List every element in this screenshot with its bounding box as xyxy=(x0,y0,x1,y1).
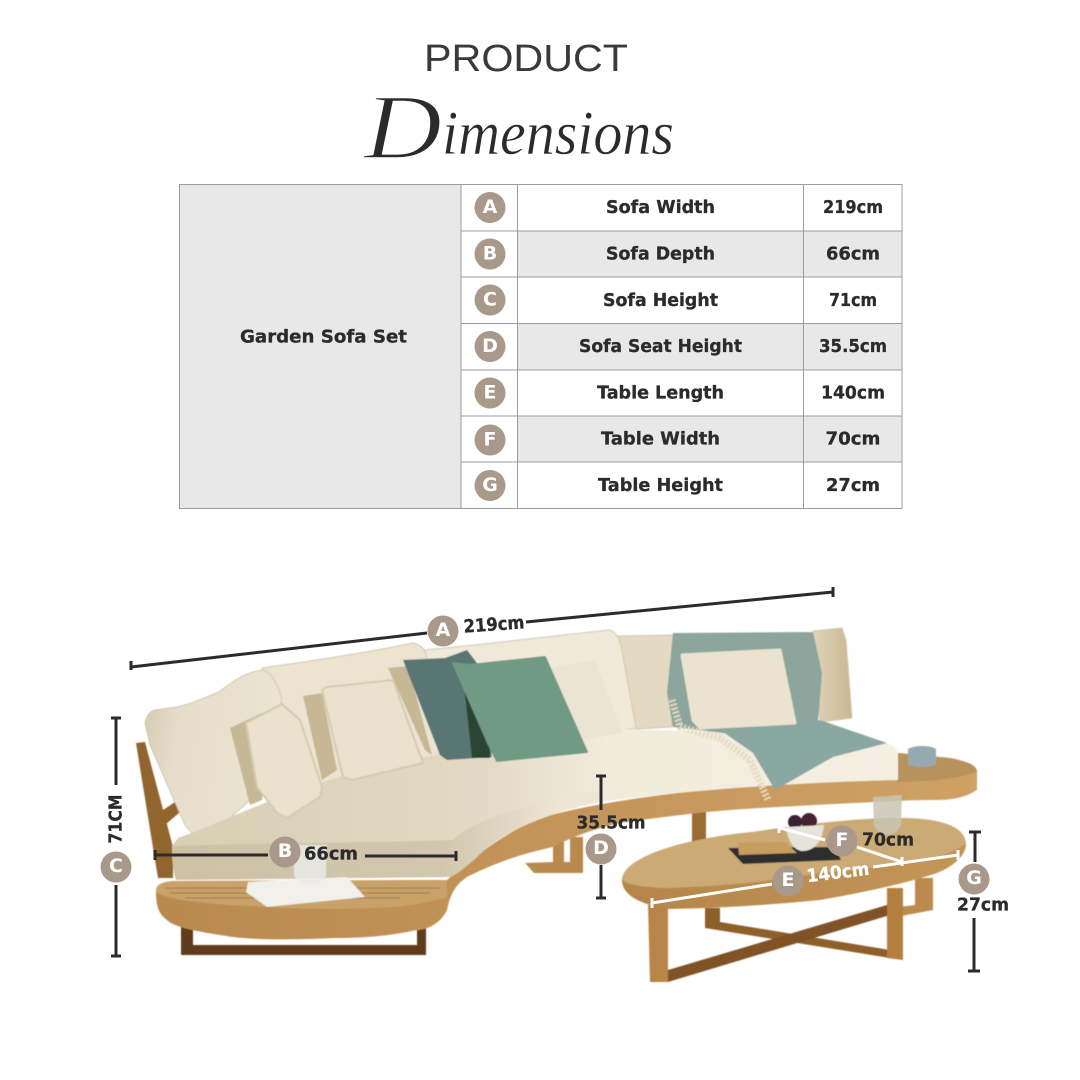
table cell: product name: Garden Sofa Set xyxy=(240,326,407,348)
seat cushion front xyxy=(172,790,600,880)
row F: table width: F xyxy=(484,428,496,450)
row C: sofa height xyxy=(474,284,877,316)
table top xyxy=(622,818,966,888)
back cushion: mid right xyxy=(617,635,673,729)
coffee table xyxy=(622,795,966,982)
row A: sofa width xyxy=(474,192,883,223)
back cushion: left xyxy=(145,670,282,837)
dimension G: table height: G xyxy=(966,867,982,889)
title xyxy=(362,38,674,178)
dimension D: seat height: D xyxy=(593,837,609,859)
dimension C: sofa height: 71CM xyxy=(106,794,126,844)
row F: table width: 70cm xyxy=(826,428,880,450)
curved wooden base xyxy=(156,753,977,939)
dimension F: table width xyxy=(779,823,914,866)
dimension A: sofa width xyxy=(131,587,833,670)
dimension C: sofa height xyxy=(100,718,132,956)
dimension E: table length: 140cm xyxy=(805,859,871,887)
row F: table width xyxy=(474,424,880,456)
dimension A: sofa width: A xyxy=(436,619,451,641)
table rim xyxy=(622,818,966,909)
right table lobe xyxy=(897,753,977,782)
shadows behind pillows xyxy=(230,666,432,805)
row B: sofa depth: Sofa Depth xyxy=(606,244,715,264)
row B: sofa depth: 66cm xyxy=(826,244,880,264)
fruit bowl xyxy=(786,813,824,851)
sofa legs xyxy=(181,810,706,955)
tray xyxy=(728,847,841,864)
pillow: dark green xyxy=(403,650,492,760)
toast xyxy=(738,842,797,855)
dimension G: table height: 27cm xyxy=(957,894,1009,916)
pillow: right cream xyxy=(682,650,795,728)
row C: sofa height: C xyxy=(483,288,497,310)
table cell: product name xyxy=(180,185,461,508)
row E: table length: E xyxy=(484,382,496,404)
dimension C: sofa height: C xyxy=(109,855,123,877)
book stack xyxy=(246,877,365,907)
throw blanket xyxy=(667,632,887,800)
heading: product: PRODUCT xyxy=(424,38,628,80)
pillow: cream behind green xyxy=(548,660,623,740)
table legs xyxy=(648,878,933,982)
row D: sofa seat height: Sofa Seat Height xyxy=(579,336,742,357)
dimension E: table length: E xyxy=(782,869,794,891)
pillow: light green xyxy=(453,657,587,761)
seat cushion xyxy=(172,729,898,880)
pillow: second cream xyxy=(322,680,423,780)
row G: table height xyxy=(474,470,880,501)
sofa illustration xyxy=(136,628,977,955)
row A: sofa width: 219cm xyxy=(823,197,883,218)
row A: sofa width: Sofa Width xyxy=(606,197,715,218)
row A: sofa width: A xyxy=(483,196,498,218)
left table slats xyxy=(165,888,440,898)
dimension E: table length xyxy=(652,850,958,908)
back cushion: left centre xyxy=(262,643,440,790)
left table top xyxy=(156,880,447,909)
back cushions xyxy=(145,628,852,837)
pillow: left cream xyxy=(246,704,322,818)
dimension G: table height xyxy=(957,832,1009,971)
row E: table length: 140cm xyxy=(821,382,885,404)
dimension B: sofa depth: B xyxy=(278,840,292,862)
dimension B: sofa depth xyxy=(155,836,456,868)
dimension D: seat height xyxy=(576,776,646,898)
mug on side table xyxy=(908,746,936,767)
heading: dimensions xyxy=(362,76,674,178)
row G: table height: 27cm xyxy=(826,475,880,496)
dimensions table xyxy=(180,184,902,508)
back cushion: centre xyxy=(423,630,636,760)
wooden back frame xyxy=(136,742,180,878)
row B: sofa depth xyxy=(474,238,880,270)
row D: sofa seat height xyxy=(474,331,887,362)
row E: table length xyxy=(474,378,885,408)
row C: sofa height: Sofa Height xyxy=(603,290,718,311)
pillow shadow: green xyxy=(462,668,490,758)
row D: sofa seat height: 35.5cm xyxy=(819,336,887,357)
dimension B: sofa depth: 66cm xyxy=(304,844,358,864)
dimension F: table width: F xyxy=(836,829,848,851)
row C: sofa height: 71cm xyxy=(829,290,877,311)
heading: dimensions: D xyxy=(362,76,442,178)
row G: table height: G xyxy=(482,474,498,496)
glass on side table xyxy=(293,845,327,885)
row E: table length: Table Length xyxy=(597,382,724,404)
dimension A: sofa width: 219cm xyxy=(463,612,525,638)
row G: table height: Table Height xyxy=(598,475,723,496)
back cushion: far right xyxy=(813,628,852,722)
dimension D: seat height: 35.5cm xyxy=(576,812,646,834)
row F: table width: Table Width xyxy=(601,428,720,450)
heading: dimensions: imensions xyxy=(442,100,674,168)
dimension F: table width: 70cm xyxy=(862,830,914,850)
row D: sofa seat height: D xyxy=(482,335,498,357)
row B: sofa depth: B xyxy=(483,242,497,264)
water glass xyxy=(873,795,902,835)
